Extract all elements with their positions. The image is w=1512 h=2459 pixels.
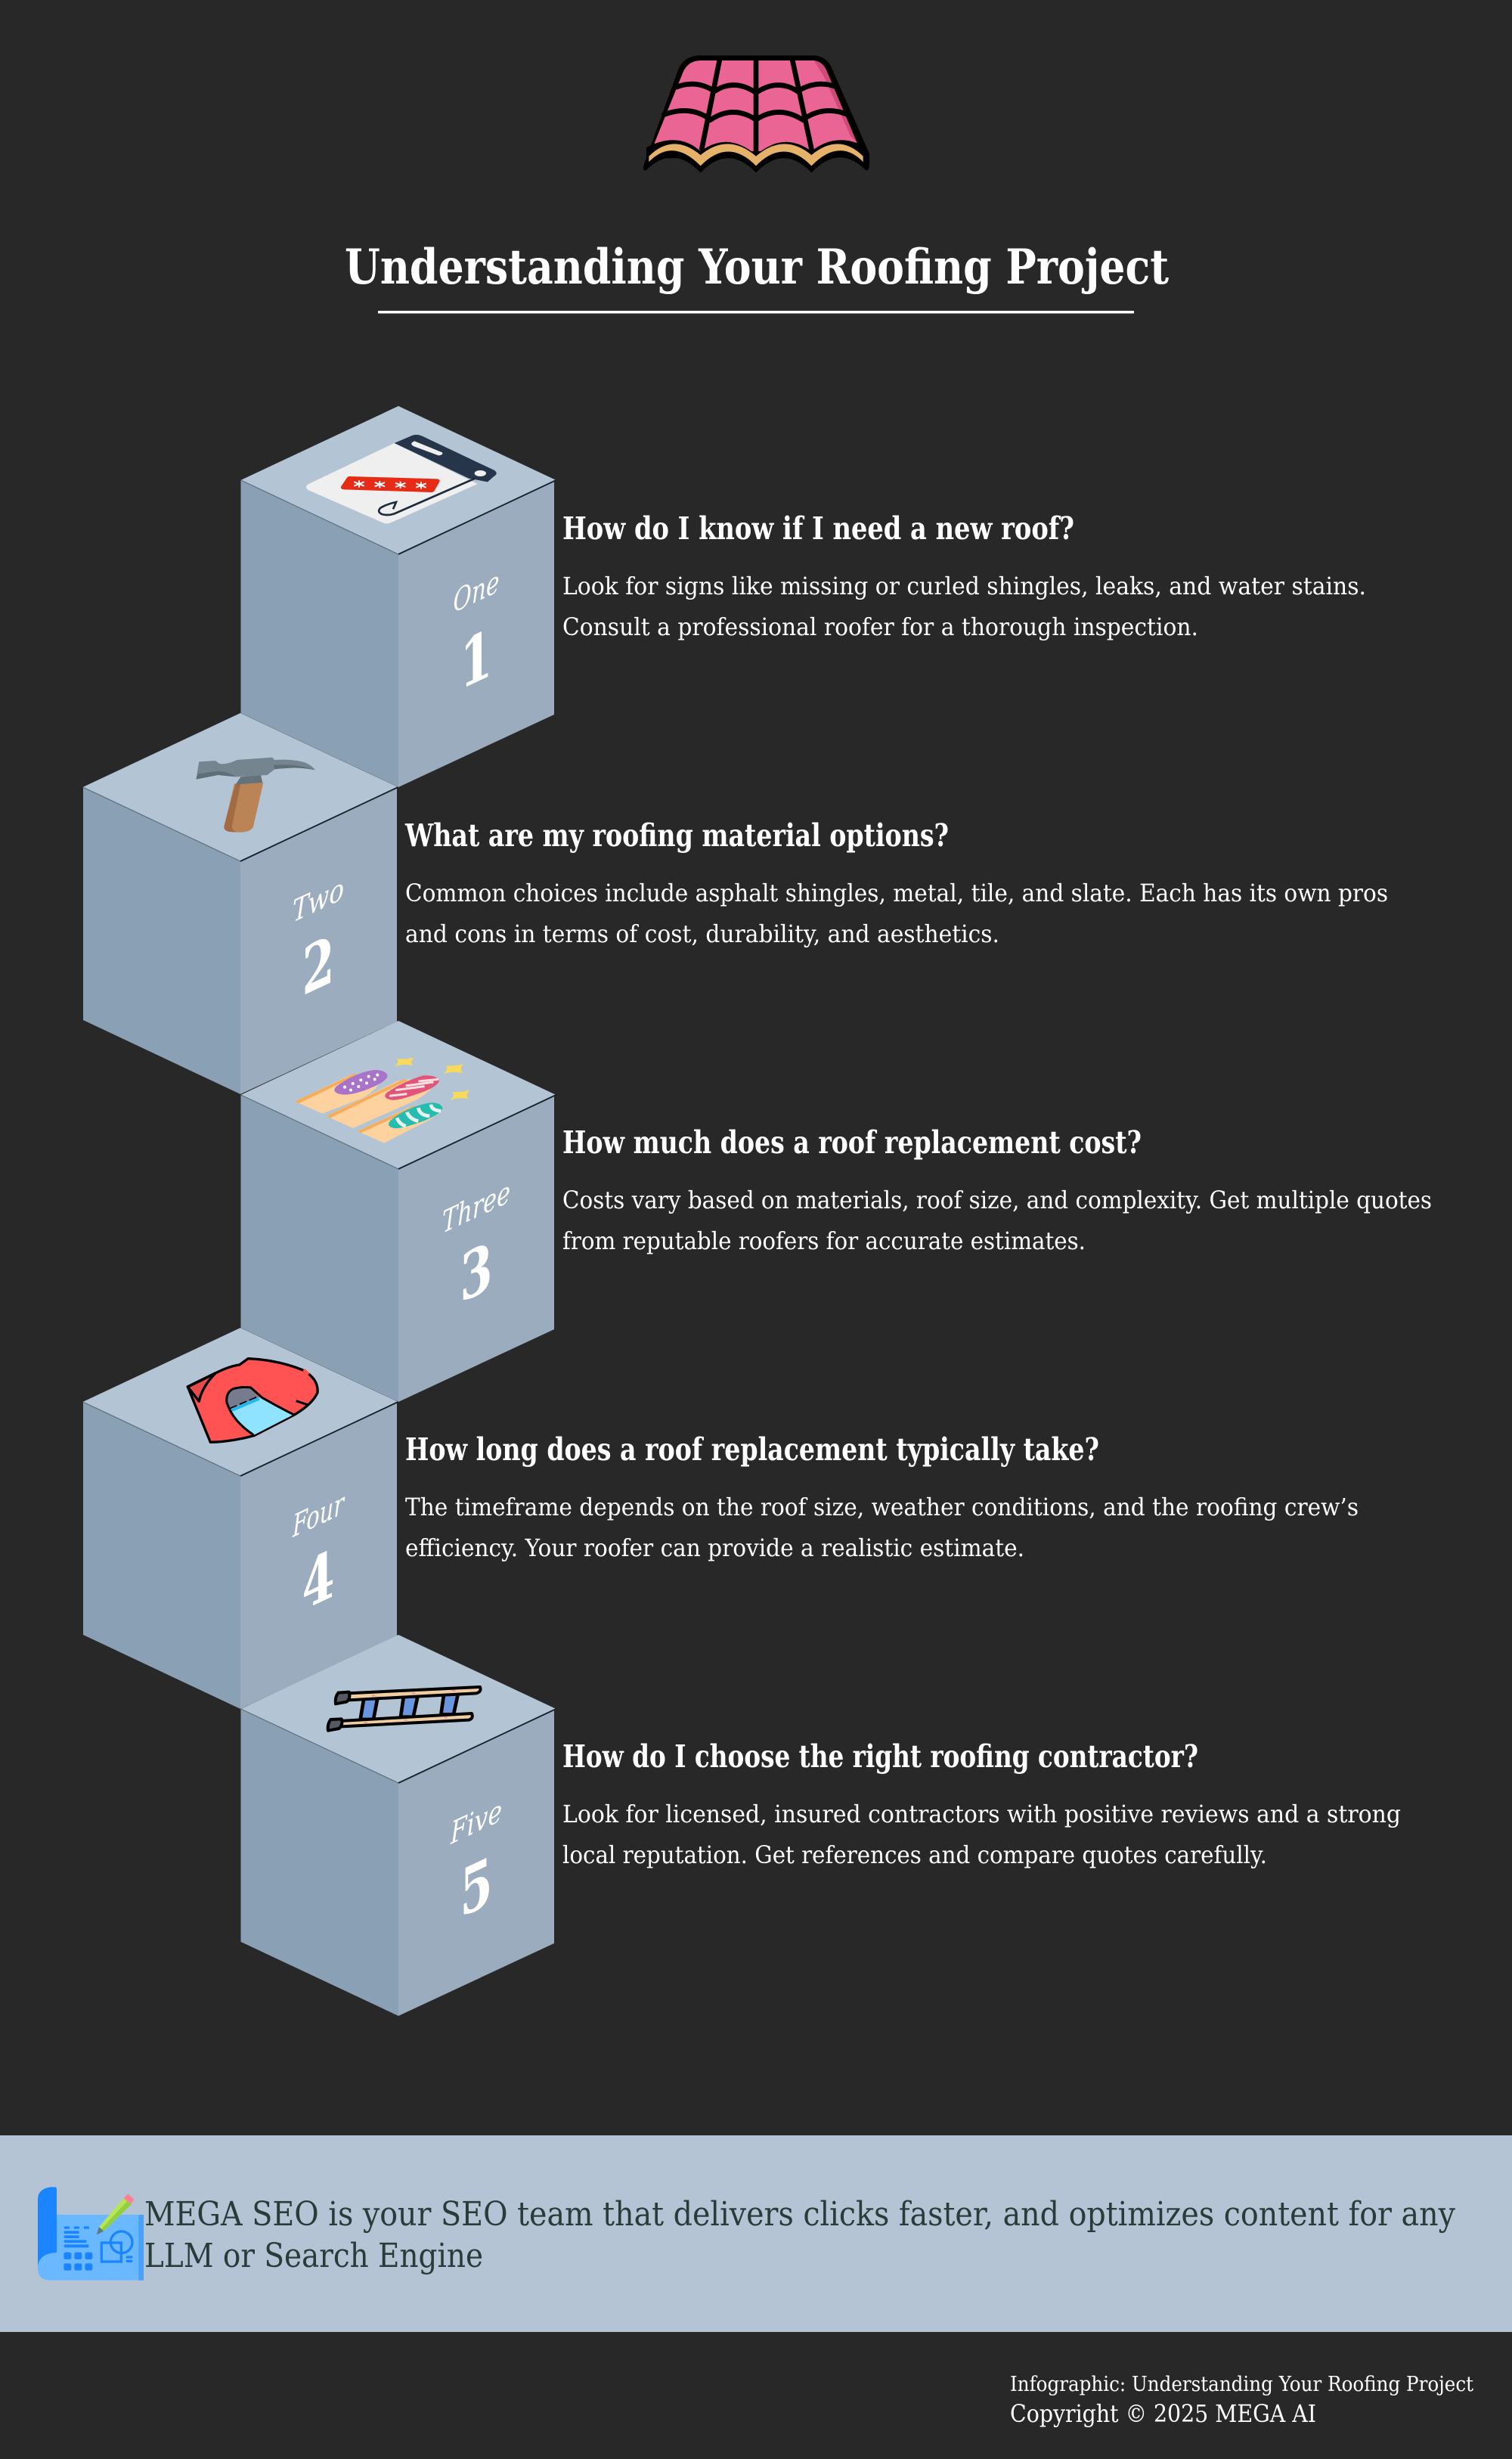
footer credits [1010, 2373, 1473, 2428]
step label: Two: Two [293, 870, 344, 929]
text block: step two [404, 817, 1388, 948]
text block: step one [562, 510, 1366, 641]
title: Understanding Your Roofing Project [345, 239, 1169, 296]
step label: One: One [454, 563, 499, 620]
panel: step one cube [240, 406, 556, 787]
icon: roof damage patch [187, 1359, 318, 1442]
text block: step four: efficiency. Your roofer can provide a realistic estimate. [405, 1533, 1024, 1562]
text block: step one: Look for signs like missing or curled shingles, leaks, and water stains. [562, 572, 1366, 600]
panel: step five cube [240, 1635, 556, 2016]
icon: painted nails [295, 1057, 470, 1143]
text block: step five [562, 1738, 1401, 1869]
text block: step four: The timeframe depends on the roof size, weather conditions, and the roofing crew’s [405, 1493, 1359, 1521]
icon: ladder [328, 1687, 481, 1731]
text block: step one: Consult a professional roofer for a thorough inspection. [562, 612, 1198, 641]
banner text: LLM or Search Engine [144, 2237, 483, 2275]
panel: step two cube [83, 713, 398, 1094]
text block: step three: Costs vary based on materials, roof size, and complexity. Get multiple quotes [562, 1186, 1432, 1214]
step label: Five: Five [450, 1792, 502, 1852]
text block: step five: How do I choose the right roofing contractor? [562, 1738, 1198, 1775]
text block: step three [562, 1124, 1432, 1255]
step number: 1: 1 [460, 614, 493, 705]
text block: step three: from reputable roofers for accurate estimates. [562, 1226, 1086, 1255]
footer credits: Infographic: Understanding Your Roofing Project [1010, 2373, 1473, 2396]
text block: step two: and cons in terms of cost, durability, and aesthetics. [405, 919, 999, 948]
text block: step one: How do I know if I need a new roof? [562, 510, 1074, 547]
step label: Four: Four [292, 1484, 345, 1545]
icon: blueprint and pencil [38, 2187, 144, 2281]
step number: 4: 4 [302, 1535, 335, 1626]
panel: step four cube [83, 1328, 398, 1709]
icon: hammer [196, 758, 315, 833]
step number: 3: 3 [460, 1227, 493, 1319]
banner text [144, 2195, 1455, 2275]
step number: 5: 5 [460, 1842, 493, 1933]
text block: step five: Look for licensed, insured contractors with positive reviews and a strong [562, 1800, 1401, 1828]
text block: step two: What are my roofing material options? [404, 817, 949, 854]
step number: 2: 2 [302, 920, 335, 1012]
text block: step three: How much does a roof replacement cost? [562, 1124, 1142, 1161]
panel: step three cube [240, 1021, 556, 1402]
footer credits: Copyright © 2025 MEGA AI [1010, 2399, 1316, 2428]
text block: step five: local reputation. Get references and compare quotes carefully. [562, 1840, 1267, 1869]
text block: step four [405, 1431, 1359, 1562]
icon: inspection card [306, 435, 497, 523]
text block: step two: Common choices include asphalt shingles, metal, tile, and slate. Each has its own pros [405, 879, 1388, 907]
icon: roof tiles [643, 55, 869, 172]
panel: promo banner [0, 2135, 1512, 2332]
text block: step four: How long does a roof replacement typically take? [405, 1431, 1099, 1468]
step label: Three: Three [442, 1174, 510, 1241]
